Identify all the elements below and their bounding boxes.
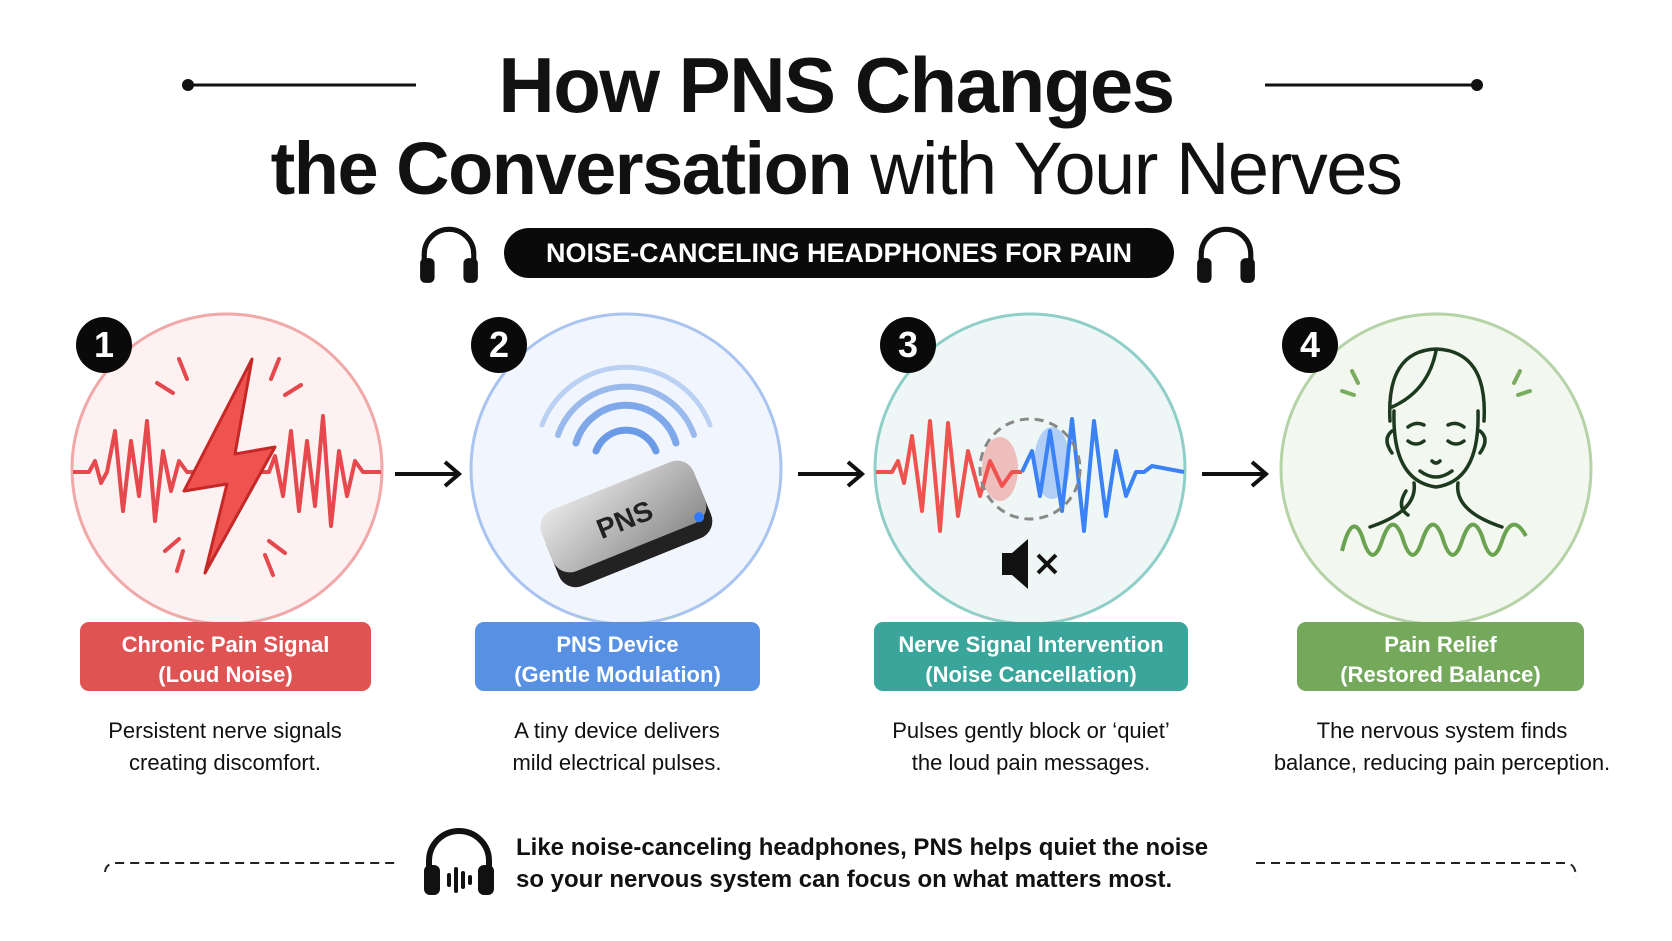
badge 4: [1282, 317, 1338, 373]
badge 1: 1: [94, 324, 114, 365]
description 3: Pulses gently block or ‘quiet’: [892, 718, 1170, 743]
icon: headphones right: [1197, 226, 1255, 283]
banner pill: [504, 228, 1174, 278]
label box 4: Pain Relief: [1384, 632, 1497, 657]
description 1: Persistent nerve signals: [108, 718, 342, 743]
description 4: [1274, 718, 1610, 775]
description 4: The nervous system finds: [1317, 718, 1567, 743]
subtitle: the Conversation with Your Nerves: [271, 127, 1401, 210]
label box 1: (Loud Noise): [158, 662, 293, 687]
description 1: [108, 718, 342, 775]
bottom dashed lines: [104, 862, 1577, 878]
description 1: creating discomfort.: [129, 750, 321, 775]
icon: headphones left: [420, 226, 478, 283]
label box 3: Nerve Signal Intervention: [898, 632, 1164, 657]
label box 3: [874, 622, 1188, 691]
description 2: mild electrical pulses.: [512, 750, 722, 775]
panel 2: PNS device: PNS: [592, 495, 657, 545]
label box 4: (Restored Balance): [1340, 662, 1541, 687]
icon: headphones with sound bars: [424, 828, 494, 895]
panel 3: intervention: [874, 312, 1186, 622]
badge 3: 3: [898, 324, 918, 365]
label box 1: [80, 622, 371, 691]
label box 2: PNS Device: [556, 632, 679, 657]
label box 2: [475, 622, 760, 691]
bottom callout text: so your nervous system can focus on what matters most.: [516, 866, 1172, 893]
bottom callout text: [516, 834, 1208, 893]
description 3: the loud pain messages.: [912, 750, 1150, 775]
arrow 1-2: [395, 460, 462, 488]
panel 1: chronic pain: [70, 312, 384, 622]
label box 4: [1297, 622, 1584, 691]
panel 4: relief: [1280, 312, 1592, 622]
label box 1: Chronic Pain Signal: [122, 632, 329, 657]
badge 2: 2: [489, 324, 509, 365]
description 2: [512, 718, 722, 775]
label box 3: (Noise Cancellation): [925, 662, 1137, 687]
badge 3: [880, 317, 936, 373]
bottom callout text: Like noise-canceling headphones, PNS helps quiet the noise: [516, 834, 1208, 861]
panel 2: PNS device: [470, 312, 782, 622]
arrow 2-3: [798, 460, 865, 488]
description 3: [892, 718, 1170, 775]
badge 2: [471, 317, 527, 373]
title line decorations: [182, 79, 1483, 91]
badge 1: [76, 317, 132, 373]
description 2: A tiny device delivers: [514, 718, 720, 743]
badge 4: 4: [1300, 324, 1320, 365]
description 4: balance, reducing pain perception.: [1274, 750, 1610, 775]
banner pill: NOISE-CANCELING HEADPHONES FOR PAIN: [546, 238, 1132, 268]
label box 2: (Gentle Modulation): [514, 662, 721, 687]
arrow 3-4: [1202, 460, 1269, 488]
title: How PNS Changes: [498, 41, 1174, 129]
